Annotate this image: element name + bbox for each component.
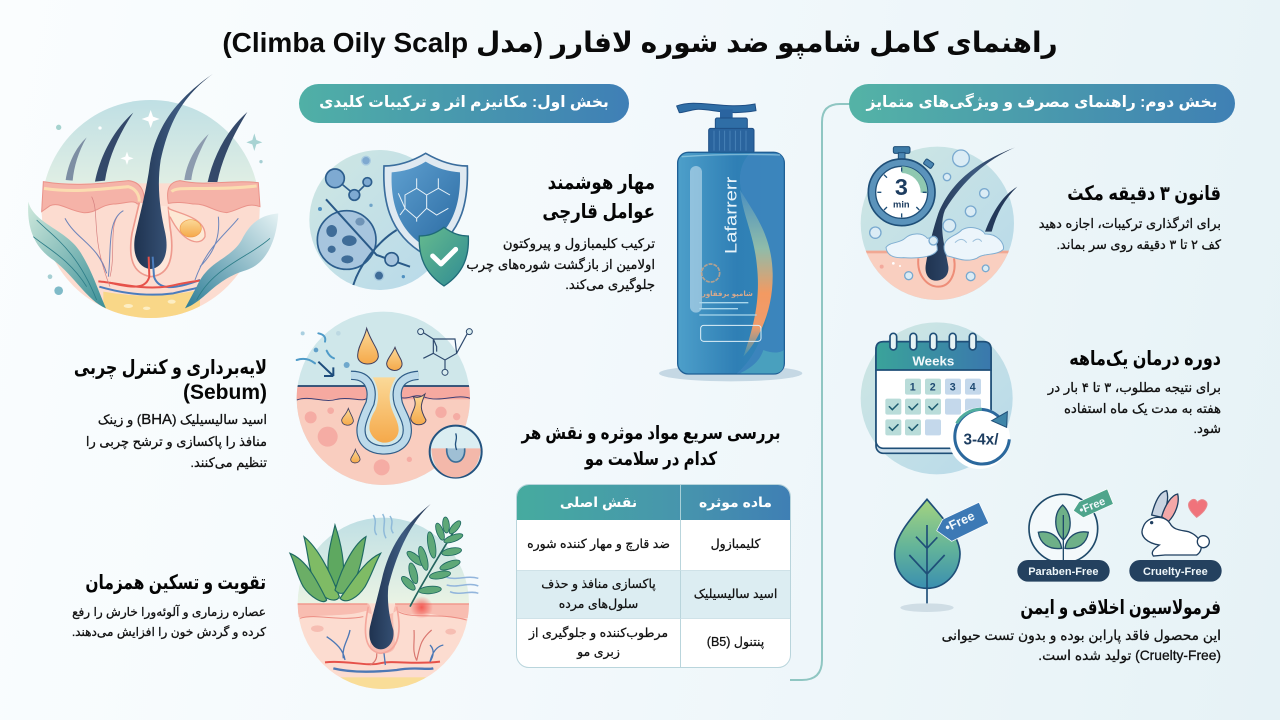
week numbers: 1	[910, 382, 916, 394]
text block: smart fungal control	[466, 172, 655, 292]
row one ingredient: کلیمبازول	[711, 537, 760, 551]
illustration: scalp cross-section	[28, 74, 278, 323]
text block: ethical and safe formulation: (Cruelty-Free) تولید شده است.	[1038, 648, 1221, 662]
text block: exfoliation and sebum control: منافذ را پاکسازی و ترشح چربی را	[86, 434, 267, 448]
text block: three minute rule: کف ۲ تا ۳ دقیقه روی سر بماند.	[1056, 236, 1221, 252]
table heading: بررسی سریع مواد موثره و نقش هر	[522, 422, 780, 443]
week numbers: 2	[930, 382, 936, 394]
table header: active ingredient	[680, 485, 790, 520]
timer label: 3	[895, 174, 908, 200]
row two ingredient	[680, 570, 790, 619]
text block: three minute rule: قانون ۳ دقیقه مکث	[1067, 183, 1221, 205]
calendar heading: Weeks	[912, 353, 954, 368]
text block: one month treatment: برای نتیجه مطلوب، ۳ تا ۴ بار در	[1048, 380, 1221, 395]
row three role	[528, 626, 668, 660]
text block: ethical and safe formulation: این محصول فاقد پارابن بوده و بدون تست حیوانی	[942, 628, 1221, 643]
row two role: سلول‌های مرده	[559, 596, 638, 610]
row three ingredient: پنتنول (B5)	[707, 635, 764, 649]
text block: three minute rule	[1039, 183, 1222, 252]
row one role: ضد قارچ و مهار کننده شوره	[527, 537, 670, 551]
leaf tag: •Free	[943, 509, 977, 535]
heading banner: section two: بخش دوم: راهنمای مصرف و ویژگی‌های متمایز	[867, 94, 1217, 111]
text block: smart fungal control: مهار هوشمند	[548, 172, 655, 194]
text block: exfoliation and sebum control: لایه‌برداری و کنترل چربی	[74, 357, 267, 379]
text block: ethical and safe formulation: فرمولاسیون اخلاقی و ایمن	[1020, 597, 1221, 619]
row three ingredient	[680, 619, 790, 667]
week numbers: 3	[950, 382, 956, 394]
illustration: aloe and rosemary over scalp	[290, 504, 478, 690]
text block: strengthen and soothe: تقویت و تسکین همزمان	[85, 572, 266, 594]
row two ingredient: اسید سالیسیلیک	[694, 587, 777, 601]
text block: smart fungal control: عوامل قارچی	[542, 201, 655, 223]
rabbit label: Cruelty-Free	[1143, 566, 1208, 578]
table header: active ingredient: ماده موثره	[699, 494, 772, 510]
icon: paraben free badge	[1017, 489, 1113, 582]
row two role	[517, 570, 680, 619]
bottle product line: شامپو برفقاور	[701, 290, 753, 298]
repeat label: 3-4x/	[964, 432, 999, 449]
table header: main role: نقش اصلی	[560, 494, 637, 510]
illustration: weekly calendar	[861, 322, 1013, 474]
background illustrations	[28, 74, 1222, 689]
text block: strengthen and soothe: کرده و گردش خون را افزایش می‌دهند.	[72, 625, 266, 639]
text block: one month treatment: دوره درمان یک‌ماهه	[1069, 348, 1221, 370]
paraben label: Paraben-Free	[1028, 566, 1098, 578]
illustration: shield and fungus	[309, 150, 468, 290]
text block: exfoliation and sebum control: تنظیم می‌کنند.	[190, 455, 267, 470]
icon: free leaf	[895, 499, 989, 612]
text block: one month treatment: هفته به مدت یک ماه استفاده	[1064, 400, 1221, 416]
icon: cruelty free rabbit	[1129, 491, 1222, 582]
heading banner: section one: بخش اول: مکانیزم اثر و ترکیبات کلیدی	[319, 94, 609, 111]
text block: strengthen and soothe: عصاره رزماری و آلوئه‌ورا خارش را رفع	[72, 605, 266, 619]
row one ingredient	[680, 520, 790, 570]
text block: exfoliation and sebum control	[74, 357, 267, 470]
text block: smart fungal control: جلوگیری می‌کند.	[565, 277, 655, 292]
text block: exfoliation and sebum control: اسید سالیسیلیک (BHA) و زینک	[98, 411, 267, 428]
row three role: مرطوب‌کننده و جلوگیری از	[529, 626, 668, 640]
paraben tag: •Free	[1078, 496, 1107, 517]
text block: smart fungal control: اولامین از بازگشت شوره‌های چرب	[466, 256, 655, 272]
text block: smart fungal control: ترکیب کلیمبازول و پیروکتون	[503, 236, 655, 251]
bottle brand text: Lafarrerr	[722, 176, 741, 254]
heading banner: section two	[849, 84, 1235, 123]
illustration: three minute timer and foam: min	[893, 200, 910, 210]
illustration: shampoo bottle	[659, 103, 802, 381]
week numbers	[910, 382, 976, 394]
illustration: three minute timer and foam	[857, 147, 1020, 304]
illustration: sebum control follicle	[290, 312, 482, 486]
table header: main role	[517, 485, 680, 520]
connector line from section two banner	[790, 104, 850, 680]
row three role: زبری مو	[577, 645, 620, 659]
table heading: کدام در سلامت مو	[585, 448, 717, 469]
text block: three minute rule: برای اثرگذاری ترکیبات، اجازه دهید	[1039, 216, 1221, 231]
table heading	[520, 422, 780, 470]
heading banner: section one	[299, 84, 629, 123]
ingredients table	[516, 484, 791, 668]
week numbers: 4	[970, 382, 976, 394]
title: راهنمای کامل شامپو ضد شوره لافارر (مدل Climba Oily Scalp)	[222, 27, 1058, 58]
text block: strengthen and soothe	[72, 572, 266, 640]
row two role: پاکسازی منافذ و حذف	[541, 577, 656, 591]
text block: ethical and safe formulation	[942, 597, 1221, 664]
text block: one month treatment	[1047, 348, 1221, 436]
text block: exfoliation and sebum control: (Sebum)	[183, 381, 267, 404]
text block: one month treatment: شود.	[1193, 421, 1221, 436]
